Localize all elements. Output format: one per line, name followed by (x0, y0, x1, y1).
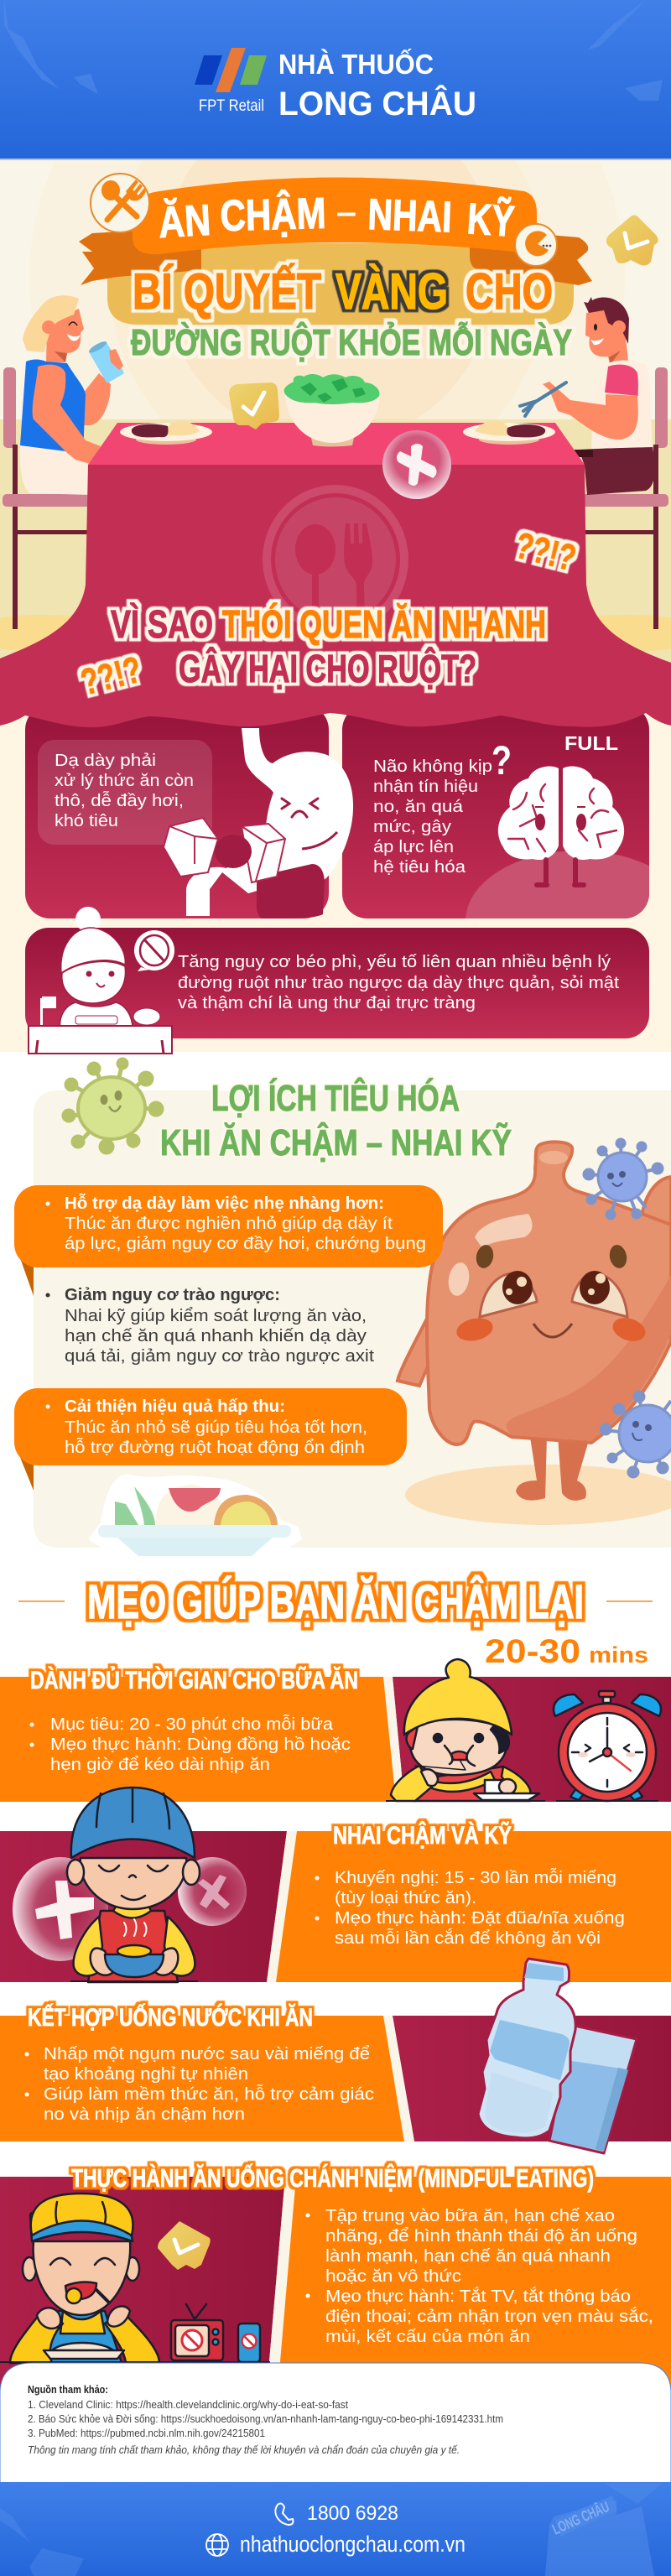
text block (178, 953, 619, 1012)
brand name (278, 48, 476, 122)
illustration: food bowl (88, 1474, 302, 1558)
panel: references (0, 2363, 671, 2483)
icon: check star (158, 2221, 211, 2270)
panel: brain (374, 736, 649, 919)
text block: no và nhịp ăn chậm hơn (44, 2105, 245, 2124)
illustration: stomach mascot (398, 1142, 671, 1501)
illustration: child in blue hat with bowl (67, 1788, 200, 1982)
text box: khó tiêu (55, 812, 118, 830)
phone number: 1800 6928 (307, 2502, 398, 2525)
illustration: table (29, 1026, 172, 1054)
icon: water glass (549, 2026, 637, 2153)
icon: stomach with food (164, 728, 353, 919)
chairs (3, 367, 668, 629)
panel: references: 2. Báo Sức khỏe và Đời sống: https://suckhoedoisong.vn/an-nhanh-lam-tang-nguy-co-beo-phi-169142331.htm (28, 2412, 503, 2425)
text block: Nhấp một ngụm nước sau vài miếng để (44, 2045, 370, 2063)
panel: references: 1. Cleveland Clinic: https://health.clevelandclinic.org/why-do-i-eat-so-fast (28, 2398, 348, 2411)
heading: why eating fast harms the gut (111, 602, 546, 690)
panel: benefits background (34, 1090, 671, 1548)
icon: brain (498, 766, 624, 885)
text block: Mẹo thực hành: Đặt đũa/nĩa xuống (335, 1909, 625, 1928)
decoration: question marks left: ??!? (77, 648, 145, 703)
banner: title (79, 174, 592, 363)
icon: spoon and fork circle (91, 174, 149, 232)
heading line 2: BÍ QUYẾT (133, 263, 321, 320)
illustration: child in yellow hat eating (386, 1659, 545, 1802)
section: enough time for meal (0, 1659, 671, 1802)
heading line 1: KỸ (466, 194, 516, 247)
callout: reduce stomach work (14, 1185, 443, 1296)
heading: why eating fast harms the gut: THÓI QUEN ĂN NHANH (222, 602, 546, 646)
text box: Dạ dày phải (55, 752, 156, 770)
heading: digestive benefits: LỢI ÍCH TIÊU HÓA (211, 1077, 460, 1119)
website: nhathuoclongchau.com.vn (240, 2532, 466, 2557)
brand name: LONG CHÂU (278, 84, 476, 122)
text block: và thậm chí là ung thư đại trực tràng (178, 994, 476, 1012)
heading line 1: ĂN (158, 196, 212, 247)
text box: xử lý thức ăn còn (55, 772, 194, 790)
icon: phone (275, 2504, 293, 2525)
icon: cross bubble left (13, 1857, 108, 1961)
label: 20-30 mins: 20-30 (485, 1633, 580, 1670)
heading line 1 (158, 189, 516, 247)
text block: hệ tiêu hóa (373, 858, 466, 877)
panel: references: 3. PubMed: https://pubmed.ncbi.nlm.nih.gov/24215801 (28, 2427, 265, 2439)
icon: question mark: ? (492, 739, 512, 783)
text block: Khuyến nghị: 15 - 30 lần mỗi miếng (335, 1868, 616, 1887)
icon: yellow check bubble (229, 382, 279, 429)
callout: reduce stomach work: áp lực, giảm nguy cơ đầy hơi, chướng bụng (65, 1235, 426, 1253)
icon: water bottle (478, 1959, 575, 2138)
label: 20-30 mins (485, 1633, 648, 1670)
callout: reduce stomach work: Hỗ trợ dạ dày làm việc nhẹ nhàng hơn: (65, 1193, 384, 1213)
text block: hoặc ăn vô thức (325, 2267, 461, 2286)
panel: obesity risk (25, 907, 649, 1054)
text block: Tập trung vào bữa ăn, hạn chế xao (325, 2207, 615, 2225)
icon: TV crossed out (171, 2304, 223, 2360)
text block: tạo khoảng nghỉ tự nhiên (44, 2065, 248, 2084)
text block: Não không kịp (373, 757, 492, 776)
text block: no, ăn quá (373, 798, 464, 816)
text block (25, 2045, 374, 2124)
text block: reduce reflux: hạn chế ăn quá nhanh khiến dạ dày (65, 1327, 367, 1345)
decoration: question marks right: ??!? (512, 524, 580, 579)
text block: Mục tiêu: 20 - 30 phút cho mỗi bữa (50, 1715, 334, 1734)
text block: sau mỗi lần cắn để không ăn vội (335, 1928, 601, 1948)
text block (315, 1868, 625, 1948)
text block (30, 1715, 351, 1774)
icon: pink cross bubble (382, 430, 451, 499)
heading line 1: – (336, 194, 356, 231)
heading line 2 (133, 263, 553, 320)
callout: reduce stomach work: Thúc ăn được nghiền nhỏ giúp dạ dày ít (65, 1215, 393, 1233)
icon: store building (545, 2495, 654, 2576)
callout: better absorption: Thúc ăn nhỏ sẽ giúp tiêu hóa tốt hơn, (65, 1418, 367, 1437)
heading line 2: VÀNG (336, 263, 448, 320)
panel: stomach (38, 728, 353, 919)
illustration: child eating (29, 907, 172, 1054)
callout: better absorption: hỗ trợ đường ruột hoạt động ổn định (65, 1438, 365, 1457)
text block: reduce reflux (45, 1286, 374, 1366)
illustration: woman drinking (20, 295, 124, 495)
text block: reduce reflux: Giảm nguy cơ trào ngược: (65, 1286, 280, 1304)
text block: Giúp làm mềm thức ăn, hỗ trợ cảm giác (44, 2084, 374, 2104)
tablecloth (0, 423, 671, 919)
section: drink water (0, 1959, 671, 2153)
header band (0, 0, 671, 160)
text block: đường ruột như trào ngược dạ dày thực quản, sỏi mật (178, 974, 619, 992)
text block: nhãng, để hình thành thái độ ăn uống (325, 2227, 637, 2246)
icon: FPT logo (195, 48, 267, 115)
heading: digestive benefits (160, 1077, 512, 1163)
icon: globe (206, 2534, 228, 2556)
panel: references: Thông tin mang tính chất tham khảo, không thay thế lời khuyên và chẩn đoán của chuyên gia y tế. (28, 2443, 460, 2456)
plate right (463, 421, 555, 445)
heading: DÀNH ĐỦ THỜI GIAN CHO BỮA ĂN (30, 1666, 358, 1694)
icon: pac-man circle (515, 224, 557, 266)
callout: better absorption: Cải thiện hiệu quả hấp thu: (65, 1397, 285, 1416)
mascot eyes (480, 1271, 627, 1317)
icon: alarm clock (554, 1691, 661, 1802)
heading line 1: NHAI (367, 190, 453, 242)
icon: blue virus top (583, 1138, 663, 1220)
text block: điện thoại; cảm nhận trọn vẹn màu sắc, (325, 2307, 653, 2326)
icon: blue virus bottom (600, 1391, 671, 1478)
scene background (0, 0, 671, 1052)
text box (38, 740, 212, 845)
heading line 1: CHẬM (220, 189, 326, 241)
text block: (tùy loại thức ăn). (335, 1889, 476, 1907)
text block: Tăng nguy cơ béo phì, yếu tố liên quan nhiều bệnh lý (178, 953, 611, 971)
text block (305, 2207, 653, 2346)
text box: thô, dễ đầy hơi, (55, 791, 184, 810)
heading: why eating fast harms the gut: GÂY HẠI CHO RUỘT? (179, 647, 476, 690)
illustration: child in yellow cap eating (0, 2194, 270, 2363)
text block: mức, gây (373, 818, 451, 836)
icon: green virus (62, 1058, 164, 1154)
text block: áp lực lên (373, 838, 454, 856)
text block: hẹn giờ để kéo dài nhịp ăn (50, 1756, 270, 1774)
heading line 2: CHO (466, 263, 553, 320)
text block: Mẹo thực hành: Tắt TV, tắt thông báo (325, 2287, 631, 2306)
text block: Mẹo thực hành: Dùng đồng hồ hoặc (50, 1736, 351, 1754)
panel: references: Nguồn tham khảo: (28, 2383, 108, 2396)
text block (373, 757, 492, 877)
section: chew slowly (0, 1788, 671, 1982)
icon: FPT logo: FPT Retail (199, 97, 264, 115)
text block: reduce reflux: Nhai kỹ giúp kiểm soát lượng ăn vào, (65, 1307, 367, 1325)
heading: digestive benefits: KHI ĂN CHẬM – NHAI KỸ (160, 1121, 512, 1163)
label: 20-30 mins: mins (589, 1642, 648, 1668)
text block: reduce reflux: quá tải, giảm nguy cơ trào ngược axit (65, 1347, 374, 1366)
icon: prohibited sign bubble (134, 930, 174, 971)
icon: store building: LONG CHÂU (549, 2497, 611, 2538)
icon: yellow star check (606, 215, 658, 266)
salad bowl (284, 374, 380, 446)
illustration: man eating (520, 297, 654, 495)
heading: KẾT HỢP UỐNG NƯỚC KHI ĂN (28, 2003, 313, 2032)
icon: cross bubble right (178, 1857, 247, 1926)
icon: plate with spoon and fork (267, 489, 404, 630)
callout: better absorption (14, 1388, 407, 1491)
heading: why eating fast harms the gut: VÌ SAO (111, 602, 213, 646)
plate left (120, 421, 212, 445)
text block: nhận tín hiệu (373, 778, 478, 796)
brand name: NHÀ THUỐC (278, 48, 434, 80)
heading: NHAI CHẬM VÀ KỸ (333, 1821, 512, 1850)
label: FULL: FULL (564, 732, 618, 754)
footer (0, 2482, 671, 2576)
section: mindful eating (0, 2162, 671, 2391)
text block: lành mạnh, hạn chế ăn quá nhanh (325, 2247, 611, 2266)
text block: mùi, kết cấu của món ăn (325, 2328, 530, 2346)
icon: phone crossed out (238, 2324, 260, 2362)
